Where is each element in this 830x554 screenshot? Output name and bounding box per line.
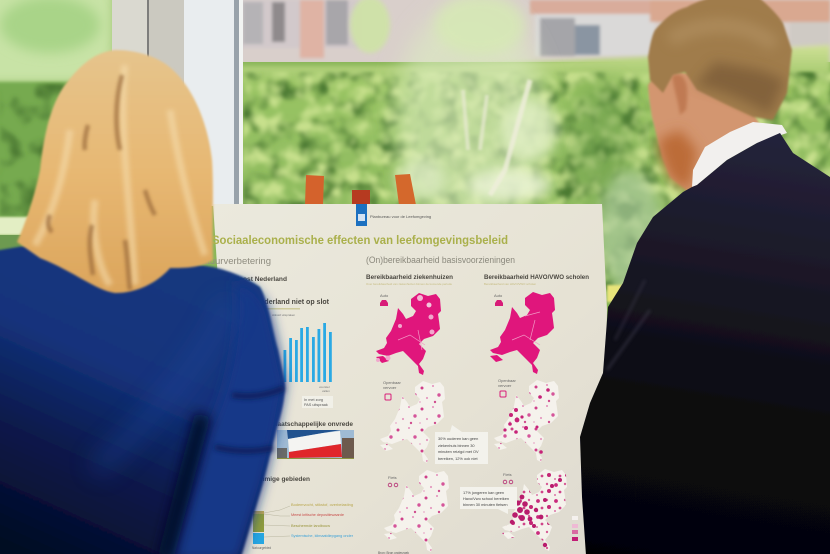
map: HAVO/VWO by car [490,292,555,374]
heading: (On)bereikbaarheid basisvoorzieningen: (On)bereikbaarheid basisvoorzieningen [366,255,515,265]
heading: ziekenhuizen column: Over bereikbaarheid van ziekenhuizen binnen de komende periode [366,282,452,286]
map: HAVO/VWO by public transport: Openbaar [498,378,516,383]
map: ziekenhuizen by bicycle: Fiets [388,475,397,480]
column legend: Beschermde landbouw [291,523,330,528]
person: man from behind [580,0,830,554]
heading: ziekenhuizen column [366,274,453,286]
map: ziekenhuizen by public transport: vervoer [383,385,397,390]
map: ziekenhuizen by car [376,293,441,375]
heading: verbetering: Natuurverbetering [195,256,271,267]
map: ziekenhuizen by car: Auto [380,293,389,298]
map: ziekenhuizen by public transport [380,380,445,463]
chart note: In met zorg [304,398,323,402]
column legend: Meest kritische depositiewaarde [291,512,344,517]
left window foliage [0,0,115,85]
pale tree foliage [395,5,545,225]
heading: ziekenhuizen column: Bereikbaarheid ziekenhuizen [366,274,453,281]
blue jacket body [0,245,285,554]
stacked column [252,511,271,550]
heading: Nederland niet op slot [255,299,330,317]
callout: ziekenhuis: ziekenhuis binnen 30 [438,443,475,448]
hair [648,0,792,120]
callout: school [460,487,517,514]
heading: maatschappelijke onvrede: Maatschappelijke onvrede [272,421,353,428]
map: HAVO/VWO by car: Auto [494,293,503,298]
chart note: PAS uitspraak [304,403,328,407]
heading: Nederland niet op slot: Nederland niet op slot [255,299,330,306]
map legend [572,516,578,541]
face and neck [648,70,760,191]
callout: ziekenhuis [435,425,488,464]
logo: Rijksoverheid: Planbureau voor de Leefomgeving [370,214,431,219]
sleeve [165,280,285,554]
callout: school: 17% jongeren kan geen [463,490,504,495]
chart note: voorstel [319,385,330,389]
bar chart [284,323,332,382]
map: HAVO/VWO by public transport: vervoer [498,383,512,388]
map: ziekenhuizen by bicycle [384,470,449,552]
blonde hair [17,50,213,293]
map: HAVO/VWO by bicycle [502,469,567,551]
heading: kwetsbare gebieden: Sommige gebieden [250,476,310,483]
logo: Rijksoverheid [356,204,431,226]
dark suit [580,133,830,554]
heading: HAVO/VWO column: Bereikbaarheid HAVO/VWO scholen [484,274,589,281]
poster easel pegs [305,174,416,205]
map: ziekenhuizen by public transport: Openbaar [383,380,401,385]
panel: poster [195,204,607,554]
ginger beard [658,130,697,191]
chart note: vallen [322,389,330,393]
callout: ziekenhuis: minuten reizigd met OV [438,449,479,454]
column legend: Systemische, klimaatdiepgang onder [291,533,354,538]
white collar [692,122,787,187]
person: woman from behind [0,50,285,554]
stacked column: Natuurgebied [252,546,271,550]
heading: HAVO/VWO column [484,274,589,286]
ear [672,75,687,115]
column legend: Bodemvocht, stikstof, overbelasting [291,502,353,507]
heading: Zuidoost Nederland: Zuidoost Nederland [225,276,287,283]
callout: school: binnen 30 minuten fietsen [463,502,508,507]
column legend [264,502,354,538]
heading: HAVO/VWO column: Bereikbaarheid van HAVO/VWO scholen [484,282,537,286]
building [240,0,830,62]
callout: ziekenhuis: bereiken, 12% ook niet [438,456,478,461]
window frame [112,0,243,206]
chart note [302,385,333,408]
map: HAVO/VWO by bicycle: Fiets [503,472,512,477]
callout: school: Havo/Vwo school bereiken [463,496,509,501]
hedge [240,45,830,300]
title: Sociaaleconomische effecten van leefomgevingsbeleid [212,233,508,247]
map: HAVO/VWO by public transport [494,378,559,462]
photo: Dutch flag [277,430,354,459]
callout: ziekenhuis: 30% ouderen kan geen [438,436,478,441]
heading: Nederland niet op slot: stikstof uitspraken [272,313,296,317]
